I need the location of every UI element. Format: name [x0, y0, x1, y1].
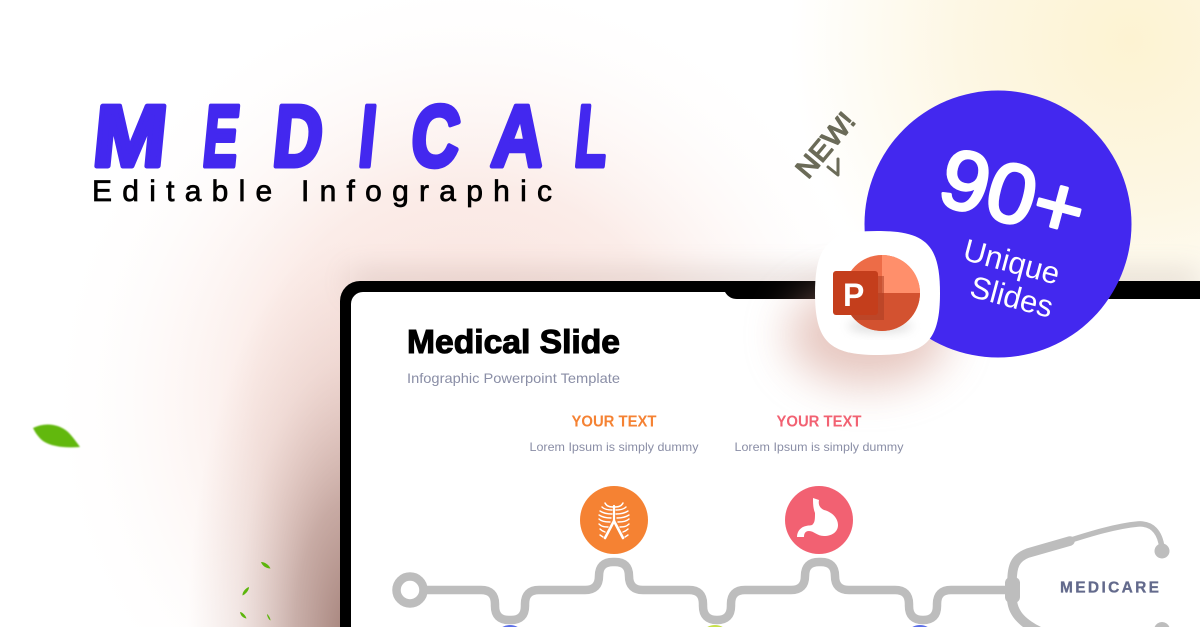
column 1 text: YOUR TEXT: [572, 414, 657, 430]
heading: MEDICAL: C: [407, 88, 465, 185]
stethoscope: [1005, 524, 1170, 627]
icon: stomach on pink circle: [785, 486, 853, 554]
heading: MEDICAL: I: [355, 88, 381, 185]
column 1 text: Lorem Ipsum is simply dummy: [530, 440, 698, 454]
leaf: small 2: [242, 587, 249, 596]
stethoscope label: MEDICARE: [1060, 580, 1159, 596]
badge number: 90+: [930, 130, 1096, 258]
laptop frame: [340, 281, 1200, 627]
stethoscope timeline path: [396, 562, 1010, 620]
heading: MEDICAL: M: [89, 88, 172, 185]
badge label: Unique: [960, 232, 1064, 291]
slide subtitle: Infographic Powerpoint Template: [407, 370, 620, 386]
laptop cast shadow: top: [350, 272, 1200, 292]
arrow: chevron: [828, 159, 838, 175]
column 2 text: [734, 414, 904, 454]
heading: MEDICAL: A: [488, 88, 550, 185]
leaf: small 4: [267, 614, 270, 620]
icon: ribcage on orange circle: [580, 486, 648, 554]
leaf: small 1: [261, 562, 270, 568]
column 2 text: YOUR TEXT: [776, 414, 862, 430]
icon shadow: [788, 285, 948, 385]
leaf: large: [33, 425, 80, 447]
badge label: Slides: [966, 269, 1057, 325]
laptop screen: [351, 292, 1200, 627]
laptop cast shadow: left side: [180, 230, 350, 627]
heading: MEDICAL: L: [571, 88, 613, 185]
lower timeline markers: [502, 625, 928, 627]
hand-written NEW!: NEW!: [790, 106, 861, 184]
background glow: pink: [30, 0, 930, 627]
heading: MEDICAL: E: [199, 88, 244, 185]
heading: MEDICAL: D: [269, 88, 328, 185]
column 1 text: [530, 414, 698, 454]
icon: PowerPoint app: [815, 231, 940, 355]
badge: 90+ unique slides: [864, 90, 1132, 358]
background glow: yellow: [700, 0, 1200, 400]
slide title: Medical Slide: [407, 323, 620, 360]
column 2 text: Lorem Ipsum is simply dummy: [734, 440, 904, 454]
icon: PowerPoint app: P: [843, 277, 864, 313]
leaf: small 3: [240, 612, 246, 618]
subheading: Editable Infographic: [92, 175, 552, 208]
badge label: [960, 232, 1064, 325]
